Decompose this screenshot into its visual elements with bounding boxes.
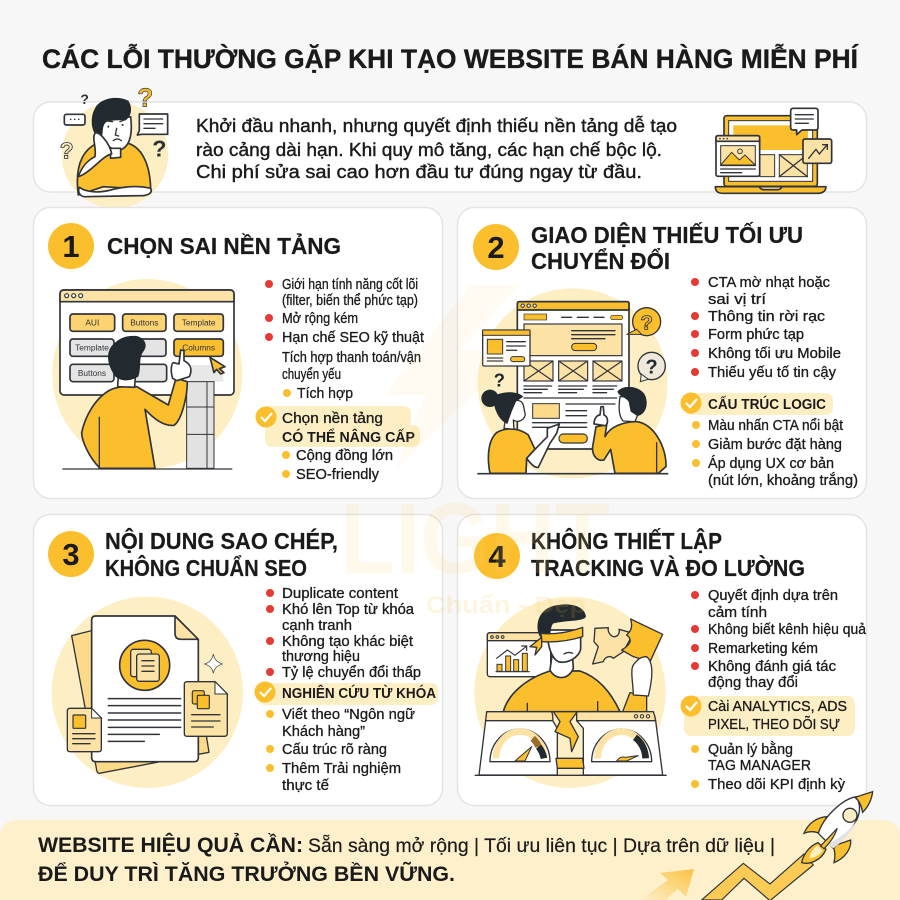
bullet list: problems 1: Giới hạn tính năng cốt lõi (282, 277, 418, 293)
bullet list: problems 2: Không tối ưu Mobile (708, 346, 841, 362)
heading 2 (531, 221, 803, 274)
watermark (340, 285, 610, 619)
intro text: rào cảng dài hạn. Khi quy mô tăng, các hạn chế bộc lộ. (196, 139, 662, 160)
small document right (184, 682, 227, 736)
bullet list: problems 1: (filter, biến thể phức tạp) (282, 293, 418, 309)
bullet list: solutions 3: Thêm Trải nghiệm (282, 761, 401, 777)
bullet list: solutions 2 (692, 418, 858, 489)
illustration: person choosing platform: AUI (85, 318, 99, 328)
panel: intro (34, 83, 866, 208)
heading 3: KHÔNG CHUẨN SEO (105, 554, 307, 581)
illustration: blindfolded man (474, 597, 667, 788)
bullet list: problems 4: cảm tính (708, 605, 767, 621)
icon: question marks: ? (137, 83, 153, 113)
gauges (490, 729, 652, 762)
bullet list: problems 2: Form phức tạp (708, 327, 804, 343)
bullet list: problems 4: Không biết kênh hiệu quả (708, 622, 867, 638)
bullet list: problems 4: động thay đổi (708, 675, 798, 691)
bullet list: solutions 4 (691, 741, 846, 793)
intro text: Chi phí sửa sai cao hơn đầu tư đúng ngay từ đầu. (196, 161, 642, 182)
icon: question marks (60, 83, 166, 163)
speech bubbles with question marks: ? (640, 311, 653, 334)
bullet list: problems 4 (691, 588, 867, 691)
bullet list: solutions 1 (282, 448, 393, 483)
bullet list: problems 2: sai vị trí (708, 292, 766, 308)
number badge 1 (48, 223, 94, 269)
number badge 3 (48, 531, 94, 577)
icon: question marks: ? (152, 136, 166, 162)
solution highlight 1: Chọn nền tảng (282, 411, 383, 427)
number badge 2: 2 (487, 230, 505, 265)
solution highlight 4 (680, 696, 855, 736)
illustration: two people reviewing page (477, 288, 668, 478)
bullet list: solutions 4: TAG MANAGER (708, 758, 811, 774)
heading 3 (105, 527, 338, 581)
bullet list: problems 3: thương hiệu (282, 649, 360, 665)
bullet list: problems 3: Duplicate content (282, 586, 398, 602)
panel: conclusion banner (0, 792, 900, 900)
illustration: person choosing platform: Template (75, 343, 109, 353)
bullet list: problems 1: chuyển yếu (282, 367, 341, 383)
bullet list: solutions 3 (266, 707, 415, 794)
illustration: person choosing platform: Buttons (78, 368, 106, 378)
number badge 2 (473, 224, 519, 270)
man (593, 387, 666, 473)
bullet list: problems 4: Quyết định dựa trên (708, 588, 838, 604)
bullet list: solutions 3: Khách hàng” (282, 724, 365, 740)
intro text: Khởi đầu nhanh, nhưng quyết định thiếu nền tảng dễ tạo (196, 115, 677, 136)
bullet list: problems 1 (265, 277, 424, 402)
panel: card 2 (458, 208, 866, 498)
bullet list: problems 1: Mở rộng kém (282, 311, 358, 327)
bullet list: problems 2: CTA mờ nhạt hoặc (708, 275, 830, 291)
arrow: faded growth arrow (640, 869, 694, 900)
bullet list: solutions 4: Theo dõi KPI định kỳ (708, 777, 846, 793)
arrow: growth line and rocket (702, 792, 873, 900)
solution highlight 1 (256, 406, 420, 447)
panel: card 1 (34, 208, 442, 498)
bullet list: problems 3: Khó lên Top từ khóa (282, 602, 415, 618)
illustration: person choosing platform: Buttons (130, 318, 158, 328)
solution highlight 4: PIXEL, THEO DÕI SỰ (708, 716, 840, 733)
number badge 1: 1 (62, 229, 80, 264)
heading 4: KHÔNG THIẾT LẬP (531, 527, 722, 554)
solution highlight 4: Cài ANALYTICS, ADS (708, 699, 847, 715)
panel: card 4 (458, 514, 867, 806)
bullet list: problems 2: Thiếu yếu tố tin cậy (708, 365, 837, 381)
bullet list: solutions 1: SEO-friendly (296, 467, 380, 483)
bullet list: solutions 1: Cộng đồng lớn (296, 448, 393, 464)
bullet list: solutions 3: Cấu trúc rõ ràng (282, 742, 387, 758)
conclusion text: ĐỂ DUY TRÌ TĂNG TRƯỞNG BỀN VỮNG. (38, 862, 455, 886)
speech bubbles with question marks: ? (494, 370, 505, 391)
speech bubbles with question marks: ? (646, 356, 658, 378)
heading 1: CHỌN SAI NỀN TẢNG (107, 231, 341, 259)
bullet list: problems 3: Không tạo khác biệt (282, 634, 413, 650)
analytics window (487, 633, 551, 677)
icon: laptop (715, 108, 832, 193)
heading 3: NỘI DUNG SAO CHÉP, (105, 527, 338, 554)
bullet list: problems 2 (691, 275, 841, 381)
icon: speech bubbles (64, 114, 168, 135)
bullet list: problems 3: Tỷ lệ chuyển đổi thấp (282, 665, 421, 681)
intro text (196, 115, 677, 182)
conclusion text: Sẵn sàng mở rộng | Tối ưu liên tục | Dựa trên dữ liệu | (308, 834, 775, 857)
bullet list: solutions 2: Áp dụng UX cơ bản (708, 455, 834, 472)
watermark: Chuẩn - Đẹp (426, 592, 586, 619)
bullet list: problems 1: Hạn chế SEO kỹ thuật (282, 330, 424, 346)
solution highlight 3: NGHIÊN CỨU TỪ KHÓA (282, 684, 436, 702)
number badge 4: 4 (488, 539, 506, 574)
puzzle pieces (593, 619, 663, 664)
number badge 4 (474, 533, 520, 579)
conclusion text (38, 833, 775, 886)
bullet list: problems 3: cạnh tranh (282, 618, 352, 634)
speech bubbles with question marks (494, 308, 665, 391)
woman (481, 390, 559, 473)
illustration: person choosing platform: Columns (182, 343, 215, 353)
heading 4 (531, 527, 805, 581)
bullet list: problems 3 (266, 586, 421, 681)
small window (483, 330, 530, 366)
heading 2: CHUYỂN ĐỔI (531, 247, 670, 274)
bullet list: problems 4: Không đánh giá tác (708, 659, 836, 675)
solution highlight 1: CÓ THỂ NÂNG CẤP (282, 428, 415, 446)
small document left (67, 708, 101, 752)
bullet list: solutions 2: (nút lớn, khoảng trắng) (708, 472, 858, 489)
solution highlight 2 (680, 392, 833, 415)
heading 2: GIAO DIỆN THIẾU TỐI ƯU (531, 221, 803, 248)
bullet list: problems 2: Thông tin rời rạc (708, 309, 825, 325)
icon: confused man (60, 83, 168, 208)
bullet list: solutions 2: Giảm bước đặt hàng (708, 437, 842, 453)
bullet list: problems 4: Remarketing kém (708, 641, 818, 657)
conclusion text: WEBSITE HIỆU QUẢ CẦN: (38, 833, 303, 857)
bullet list: solutions 3: thực tế (282, 778, 329, 794)
illustration: person choosing platform: Template (182, 318, 216, 328)
bullet list: problems 1: Tích hợp thanh toán/vận (282, 350, 421, 366)
icon: question marks: ? (60, 137, 74, 163)
bullet list: solutions 4: Quản lý bằng (708, 741, 793, 758)
illustration: person choosing platform (52, 279, 242, 469)
bullet list: problems 1: Tích hợp (297, 386, 353, 402)
solution highlight 3 (254, 682, 438, 705)
title: CÁC LỖI THƯỜNG GẶP KHI TẠO WEBSITE BÁN HÀNG MIỄN PHÍ (42, 43, 859, 74)
number badge 3: 3 (62, 537, 80, 572)
icon: question marks: ? (80, 91, 89, 107)
watermark: LIGHT (340, 483, 610, 595)
illustration: duplicated documents (52, 597, 243, 788)
heading 4: TRACKING VÀ ĐO LƯỜNG (531, 554, 805, 581)
panel: card 3 (34, 514, 442, 806)
bullet list: solutions 2: Màu nhấn CTA nổi bật (708, 418, 843, 434)
solution highlight 2: CẤU TRÚC LOGIC (708, 395, 826, 413)
bullet list: solutions 3: Viết theo “Ngôn ngữ (282, 707, 415, 723)
